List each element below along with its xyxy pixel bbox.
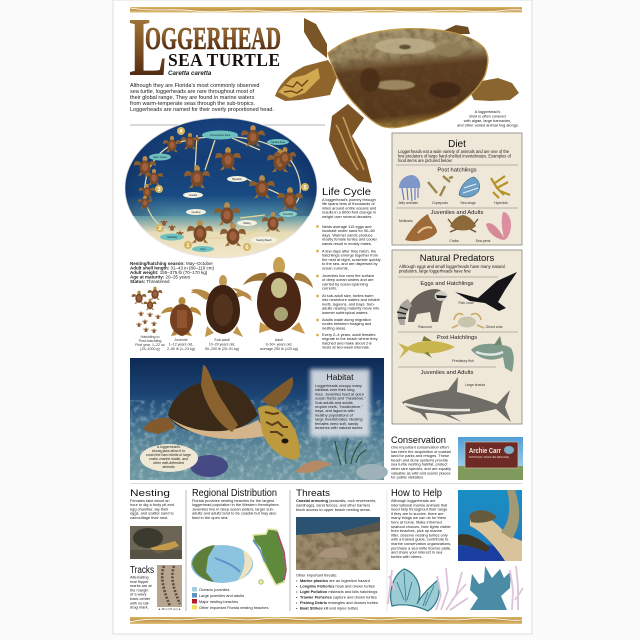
intro text: Loggerheads are named for their overly proportioned head.: [130, 107, 274, 113]
life cycle intro: A loggerhead's journey through: [322, 197, 376, 202]
intro text: Although they are Florida's most commonly observed: [130, 83, 259, 89]
icon: sea slugs: [459, 177, 480, 197]
threats list: •: [296, 594, 298, 600]
seabed texture: [130, 400, 384, 480]
carapace mottling: [328, 29, 488, 128]
callout: strong jaws: crush the hard shells of large: [146, 453, 191, 457]
heading: conservation: Conservation: [391, 435, 446, 446]
text box: habitat: large invertebrates. Nesting: [315, 417, 363, 422]
icon: jack fish: [398, 336, 455, 359]
tracks text: of a wavy: [130, 592, 146, 597]
callout: strong jaws: strong jaws allow it to: [152, 449, 185, 453]
regional text: adults and adults tend to be coastal but may also: [192, 511, 276, 516]
stage captions: 50–200 lb (25–91 kg): [205, 347, 239, 351]
panel: natural predators: [392, 250, 522, 424]
panel: habitat: [130, 358, 388, 480]
species facts: Age at maturity:: [130, 274, 165, 280]
callout: strong jaws: A loggerhead's: [157, 445, 180, 449]
conservation text: other rare species, and are equally: [391, 466, 451, 471]
life cycle bullets: warmer subtropical waters.: [322, 310, 368, 315]
stage labels: Open Ocean: [153, 156, 167, 159]
tracks text: marks are at: [130, 583, 153, 588]
map legend: [192, 587, 268, 610]
text box: habitat: females need soft, sandy: [315, 421, 358, 426]
map legend: Other important Florida nesting beaches: [199, 605, 268, 610]
conservation text: valuable as wild and scenic places: [391, 470, 451, 475]
section: threats: [296, 488, 380, 610]
life cycle bullets: nests at two-week intervals.: [322, 345, 370, 350]
stage labels: Nesting Beach: [256, 239, 272, 242]
heading: natural predators: Natural Predators: [420, 253, 494, 264]
help text: Although loggerheads are: [391, 498, 436, 503]
heading: nesting: Nesting: [130, 488, 170, 499]
life cycle bullets: adults nearing maturity move into: [322, 306, 379, 311]
track width caption: ◄ 28 in (70 cm) ►: [158, 607, 181, 611]
section: how to help: [388, 488, 523, 611]
text box: habitat: habitats over their long: [315, 387, 354, 392]
stage captions: Juvenile: [174, 338, 188, 342]
heading: how to help: How to Help: [391, 488, 442, 499]
photo: swimming turtle: [458, 490, 522, 561]
icon: sea pens: Sea pens: [476, 239, 491, 243]
subheading: post hatchlings: Post Hatchlings: [437, 335, 477, 341]
life cycle text: [316, 186, 381, 350]
species facts: Status:: [130, 279, 146, 284]
regional text: loggerhead population in the Western Hemisphere.: [192, 502, 280, 507]
title: Caretta caretta: [168, 70, 212, 77]
help text: if they are to survive, there are: [391, 511, 444, 516]
species facts: Threatened: [145, 279, 170, 284]
stage numbers: 2: [158, 226, 162, 232]
heading: life cycle: Life Cycle: [322, 186, 371, 198]
life cycle bullets: A few days after they hatch, the: [322, 248, 376, 254]
diet intro: Loggerheads eat a wide variety of animals and are one of the: [398, 149, 510, 154]
regional text: Juveniles live in deep ocean waters; larger sub-: [192, 506, 275, 511]
icon: coral row: [388, 566, 523, 611]
stage numbers: 6: [245, 245, 249, 251]
life cycle bullets: reefs, lagoons, and bays. Sub-: [322, 301, 375, 306]
conservation text: land for parks and refuges. These: [391, 453, 449, 458]
title: L: [129, 1, 167, 94]
subheading: juveniles and adults: Juveniles and Adults: [421, 370, 474, 376]
stage captions: 10–20 years old,: [209, 342, 235, 346]
icon: sub-adult: [191, 275, 252, 337]
callout: strong jaws: animals.: [162, 465, 176, 469]
shell caption: shell is often covered: [469, 114, 506, 118]
life cycle bullets: sands result in mostly males.: [322, 241, 372, 246]
text box: habitat: lives. Juveniles feed at open: [315, 391, 364, 396]
stage captions: Hatchling to: [141, 335, 159, 339]
threats list: Light Pollution misleads and kills hatchlings: [300, 589, 377, 594]
label: predatory fish: Predatory fish: [452, 359, 474, 363]
threats text: block access to upper beach nesting areas.: [296, 507, 371, 512]
tracks text: Alternating: [130, 574, 149, 580]
help text: international marine animals that: [391, 502, 448, 507]
life cycle bullets: At sub-adult size, turtles swim: [322, 293, 373, 298]
icon: hydroids: [491, 176, 510, 198]
shell caption: A loggerhead's: [475, 109, 500, 114]
callout: strong jaws: other well-defended: [153, 461, 184, 465]
stage numbers: 4: [179, 129, 183, 135]
life cycle bullets: hatched and make about 2-8: [322, 340, 372, 345]
text box: habitat: ocean fronts and "meadows.": [315, 396, 366, 401]
threats list: Boat Strikes kill and injure turtles: [300, 606, 358, 610]
predators intro: Although eggs and small loggerheads have many natural: [399, 264, 505, 269]
heading: regional distribution: Regional Distribution: [192, 488, 277, 499]
icon: seagrass: [335, 438, 366, 465]
icon: purple rock: [190, 455, 228, 477]
divider above bottom row: [130, 482, 522, 484]
diet labels: [398, 201, 508, 205]
text box: habitat: healthy populations of: [315, 412, 354, 417]
threats list: Fishing Debris entangles and drowns turtles: [300, 600, 378, 605]
pink sea whip: [388, 568, 468, 610]
conservation text: sea turtle nesting habitat, protect: [391, 462, 448, 467]
threats list: Trawler Fisheries capture and drown turtles: [300, 594, 377, 600]
tracks text: the margin: [130, 587, 148, 592]
intro text: their global range. They are found in marine waters: [130, 95, 255, 101]
title: SEA TURTLE: [168, 50, 280, 70]
subheading: eggs and hatchlings: Eggs and Hatchlings: [420, 281, 474, 287]
threats list: •: [296, 584, 298, 588]
help text: purchase a sea turtle license plate,: [391, 545, 451, 550]
text box: habitat: [310, 369, 370, 437]
title: [129, 1, 281, 94]
shell caption: with algae, large barnacles,: [464, 118, 511, 123]
life cycle bullets: to the sea, and are dispersed by: [322, 261, 378, 266]
stage captions: 1–12 years old,: [169, 342, 193, 346]
photo: Archie Carr sign: Archie Carr: [469, 448, 501, 455]
stage labels: Nest: [201, 248, 206, 251]
icon: shark: [402, 377, 511, 422]
tracks text: track center: [130, 596, 151, 601]
stage captions: 2–50 lb (1–23 kg): [167, 347, 195, 351]
stage labels: Nesting Area: [271, 141, 286, 144]
icon: habitat turtle: [143, 365, 300, 460]
conservation text: has been the acquisition of coastal: [391, 449, 451, 454]
icon: raccoon: [397, 289, 448, 325]
conservation text: One important conservation effort: [391, 444, 450, 450]
stage captions: average 250 lb (120 kg): [260, 347, 298, 351]
life cycle bullets: mostly female turtles and cooler: [322, 237, 378, 242]
diet labels: Copepods: [432, 201, 448, 205]
help text: many things we can do for them: [391, 515, 446, 520]
icon: juvenile: [161, 297, 201, 336]
subheading: post hatchlings: Post hatchlings: [437, 168, 477, 174]
conservation text: for public visitation.: [391, 475, 424, 480]
diet intro: food items are pictured below:: [398, 158, 453, 163]
section: nesting: [130, 488, 182, 611]
help text: litter, observe nesting turtles only: [391, 532, 448, 537]
stage captions: Post-hatchling: [139, 339, 161, 343]
predators intro: predators, large loggerheads have few.: [399, 268, 471, 274]
icon: mollusks: Mollusks: [399, 219, 413, 223]
arrows nest cycle: [195, 135, 265, 238]
stage captions: to 60+ years old,: [266, 342, 292, 346]
nesting text: egg chamber, lay their: [130, 506, 169, 511]
icon: seashell: [295, 460, 333, 473]
map legend: Large juveniles and adults: [199, 593, 244, 598]
heading: tracks: Tracks: [130, 565, 154, 576]
threats list: Marine plastics are an ingestion hazard: [300, 578, 370, 583]
icon: rear flipper right: [470, 78, 519, 101]
panel: diet: [392, 133, 522, 245]
stage labels: Convergence Zone: [210, 134, 231, 137]
intro text: from warm-temperate seas through the sub-tropics.: [130, 101, 255, 107]
icon: head: [275, 60, 338, 101]
nesting text: eggs, and scatter sand to: [130, 511, 174, 516]
text box: habitat: beaches with natural dunes.: [315, 425, 363, 430]
predator labels: [418, 301, 503, 329]
life cycle bullets: migrate to the beach where they: [322, 336, 378, 341]
stage labels: Coastal: [189, 194, 198, 197]
migration arc: [145, 137, 300, 240]
nesting text: hour to dig a body pit and: [130, 502, 174, 507]
help text: turtles with others.: [391, 554, 423, 559]
diet labels: Jelly animals: [398, 201, 418, 205]
stage labels: Migration: [232, 178, 243, 181]
help text: with a trained guide, contribute to: [391, 537, 448, 542]
section: regional distribution: [191, 488, 286, 610]
life cycle bullets: routes between foraging and: [322, 321, 371, 326]
stage captions: Adult: [275, 338, 283, 342]
subheading: juveniles and adults: Juveniles and Adults: [431, 210, 484, 216]
pink coral right: [510, 566, 523, 610]
teal fan coral: [391, 569, 439, 611]
species facts: 155–375 lb (70–170 kg): [158, 270, 208, 275]
life cycle bullets: Every 2–4 years, adult females: [322, 332, 375, 337]
diet labels: Hydroids: [494, 201, 508, 205]
help text: marine conservation organizations,: [391, 541, 451, 546]
regional text: feed in the open sea.: [192, 515, 228, 520]
icon: adult: [243, 257, 313, 334]
threats list: •: [296, 589, 298, 594]
icon: rear flipper top: [443, 25, 470, 34]
photo: Archie Carr sign: NATIONAL WILDLIFE REFUGE: [469, 455, 509, 459]
life cycle bullets: into nearshore waters and inhabit: [322, 297, 380, 302]
icon: ghost crab: [452, 314, 484, 328]
species facts: Nesting/hatching season:: [130, 261, 185, 266]
help text: from beaches, pick up marine: [391, 528, 442, 533]
stage numbers: 5: [303, 185, 307, 191]
threats list: Other important threats:: [296, 572, 337, 578]
poster sheet: [113, 0, 532, 634]
bottom decorative gold band: [130, 617, 522, 624]
icon: jelly animals: [399, 175, 420, 201]
section: conservation: [391, 435, 523, 480]
species facts: 20–35 years: [164, 274, 191, 280]
stage labels: Feeding: [192, 211, 201, 214]
life cycle bullets: the nest at night, scramble quickly: [322, 257, 381, 262]
stage labels: Courtship: [283, 213, 294, 216]
stage captions: Sub-adult: [214, 338, 230, 342]
species facts: Adult weight:: [130, 270, 159, 275]
icon: fish crow: [455, 272, 517, 311]
icon: front flipper: [329, 104, 372, 183]
threats list: •: [296, 606, 298, 610]
predator labels: Ghost crab: [485, 325, 503, 329]
stage labels: Hatchling: [167, 236, 178, 239]
heading: threats: Threats: [296, 488, 330, 499]
stage numbers: [155, 127, 309, 251]
species facts: Adult shell length:: [130, 266, 170, 270]
map legend: Oceanic juveniles: [199, 587, 230, 592]
growth stages: [132, 257, 313, 351]
stage labels: Mating: [243, 222, 251, 225]
predator labels: Fish crow: [459, 301, 474, 305]
nesting text: camouflage their nest.: [130, 515, 168, 520]
life cycle bullets: Juveniles live near the surface: [322, 273, 374, 278]
icon: snook fish: [471, 336, 514, 372]
photo: armored beach: [296, 517, 380, 570]
divider below intro: [130, 124, 325, 126]
threats list: •: [296, 578, 298, 583]
heading: diet: Diet: [448, 139, 466, 150]
tracks text: rear flipper: [130, 579, 149, 584]
life cycle bullets: days. Warmer sands produce: [322, 232, 373, 237]
threats text: sandbags), sand fences, and other barriers: [296, 502, 370, 508]
icon: rear flipper upper: [304, 18, 327, 58]
life cycle bullets: incubate under sand for 50–60: [322, 228, 376, 233]
diet labels: Sea slugs: [460, 201, 476, 205]
stage captions: (25–1000 g): [140, 347, 160, 351]
threats text: Coastal armoring (seawalls, rock revetments,: [296, 498, 376, 503]
map: Florida: [253, 529, 286, 585]
life cycle bullets: [316, 224, 381, 350]
life cycle bullets: Nests average 115 eggs and: [322, 224, 371, 229]
text box: habitat: Sub-adults and adults: [315, 400, 353, 405]
life cycle intro: results in a 6000-fold change in: [322, 210, 376, 215]
stage numbers: 3: [157, 187, 161, 193]
photo: turtle tracks: [157, 565, 182, 607]
diet intro: few predators of large hard-shelled invertebrates. Examples of: [398, 154, 512, 158]
photo: Archie Carr sign: [458, 437, 523, 480]
life cycle bullets: ocean currents.: [322, 265, 349, 270]
threats list: •: [296, 600, 298, 605]
nesting text: Females take about an: [130, 498, 170, 503]
life cycle bullets: nesting areas.: [322, 325, 346, 330]
stage labels: [149, 130, 297, 252]
callout: strong jaws: [140, 444, 198, 472]
callout: strong jaws: crabs, marine snails, and: [149, 457, 188, 461]
text box: habitat: Habitat: [327, 372, 354, 382]
text box: habitat: Loggerheads occupy many: [315, 383, 362, 388]
help text: and share your interest in sea: [391, 550, 443, 555]
stage numbers: 1: [186, 243, 190, 249]
title: OGGERHEAD: [145, 20, 281, 56]
life cycle bullets: Adults wade along migration: [322, 317, 371, 322]
photo: nesting turtle: [130, 526, 182, 559]
map: Atlantic oval: [191, 545, 253, 583]
threats list: Longline Fisheries hook and drown turtles: [300, 584, 375, 588]
help text: need help throughout their range: [391, 507, 447, 512]
life cycle bullets: hatchlings emerge together from: [322, 253, 378, 258]
icon: hatchlings: [132, 287, 162, 333]
species facts: May–October: [185, 261, 214, 266]
fan coral ribs: [397, 572, 434, 606]
species facts: 31–43 in (80–110 cm): [169, 266, 214, 270]
text box: habitat: bays, and lagoons with: [315, 408, 355, 413]
stage captions: [135, 335, 298, 351]
life stage turtles: [134, 125, 303, 246]
predator labels: Raccoon: [418, 325, 432, 329]
label: large sharks: Large sharks: [465, 383, 485, 387]
life cycle diagram: [125, 118, 317, 258]
life cycle bullets: currents.: [322, 286, 337, 291]
life cycle intro: miles around entire oceans and: [322, 205, 376, 210]
life cycle bullets: of deep ocean waters and are: [322, 277, 373, 282]
icon: carapace: [328, 29, 488, 128]
icon: crab: Crabs: [449, 239, 459, 243]
life cycle intro: weight over several decades.: [322, 214, 372, 219]
regional text: Florida provides nesting beaches for the largest: [192, 498, 275, 503]
top decorative gold band: [130, 7, 522, 12]
map legend: Major nesting beaches: [199, 599, 238, 604]
icon: copepods: [428, 176, 453, 196]
teal branching coral: [470, 566, 511, 610]
shell caption: and other varied animal hog alongs.: [457, 122, 519, 128]
stage captions: First year, 1–22 oz: [135, 343, 165, 347]
icon: right rock: [356, 464, 388, 480]
main loggerhead turtle illustration: [275, 18, 519, 183]
help text: here at home. Make informed: [391, 520, 442, 524]
help text: seafood choices, hide lights visible: [391, 524, 451, 529]
intro text: sea turtle, loggerheads are rare throughout most of: [130, 89, 255, 95]
conservation text: beach and dune systems provide: [391, 457, 448, 462]
life cycle bullets: carried by ocean-spanning: [322, 281, 368, 286]
tracks text: with no tail-: [130, 600, 150, 605]
tracks text: drag mark.: [130, 605, 149, 610]
life cycle intro: life spans tens of thousands of: [322, 201, 375, 206]
text box: habitat: require reefs, "hardbottom,": [315, 404, 363, 409]
threats list: [296, 572, 378, 610]
